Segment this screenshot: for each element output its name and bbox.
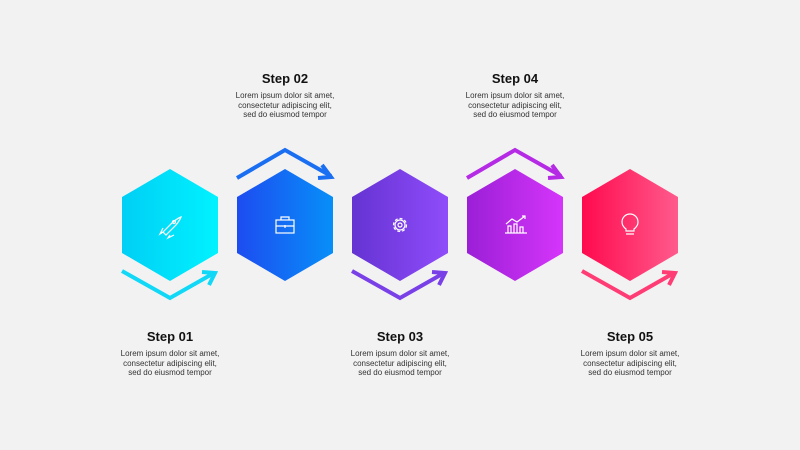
icon: gear [394,218,406,232]
text: step 01: sed do eiusmod tempor [128,368,212,377]
text: step 05: Step 05 [607,329,653,344]
icon: rocket [160,217,181,238]
text: step 01: consectetur adipiscing elit, [123,359,217,368]
arrow 3 [352,271,445,298]
text: step 04: consectetur adipiscing elit, [468,101,562,110]
text: step 01: Step 01 [147,329,193,344]
text: step 04: sed do eiusmod tempor [473,110,557,119]
text: step 03: Step 03 [377,329,423,344]
text: step 05: sed do eiusmod tempor [588,368,672,377]
arrow 4 [467,150,561,178]
text: step 04 [466,71,564,119]
arrow 5 [582,271,675,298]
icon: chart [505,216,527,233]
text: step 02: consectetur adipiscing elit, [238,101,332,110]
hexagon 3 [352,169,448,281]
arrow 1 [122,271,215,298]
text: step 02 [236,71,334,119]
text: step 04: Lorem ipsum dolor sit amet, [466,91,564,100]
text: step 03: consectetur adipiscing elit, [353,359,447,368]
icon: bulb [622,214,638,234]
text: step 03: sed do eiusmod tempor [358,368,442,377]
hexagon 5 [582,169,678,281]
text: step 04: Step 04 [492,71,538,86]
text: step 05: consectetur adipiscing elit, [583,359,677,368]
text: step 01: Lorem ipsum dolor sit amet, [121,349,219,358]
text: step 05: Lorem ipsum dolor sit amet, [581,349,679,358]
hexagon 1 [122,169,218,281]
text: step 03: Lorem ipsum dolor sit amet, [351,349,449,358]
arrow 2 [237,150,331,178]
hexagon 4 [467,169,563,281]
text: step 03 [351,329,449,377]
text: step 01 [121,329,219,377]
text: step 02: Lorem ipsum dolor sit amet, [236,91,334,100]
hexagon 2 [237,169,333,281]
text: step 02: Step 02 [262,71,308,86]
text: step 05 [581,329,679,377]
text: step 02: sed do eiusmod tempor [243,110,327,119]
icon: briefcase [276,217,294,233]
